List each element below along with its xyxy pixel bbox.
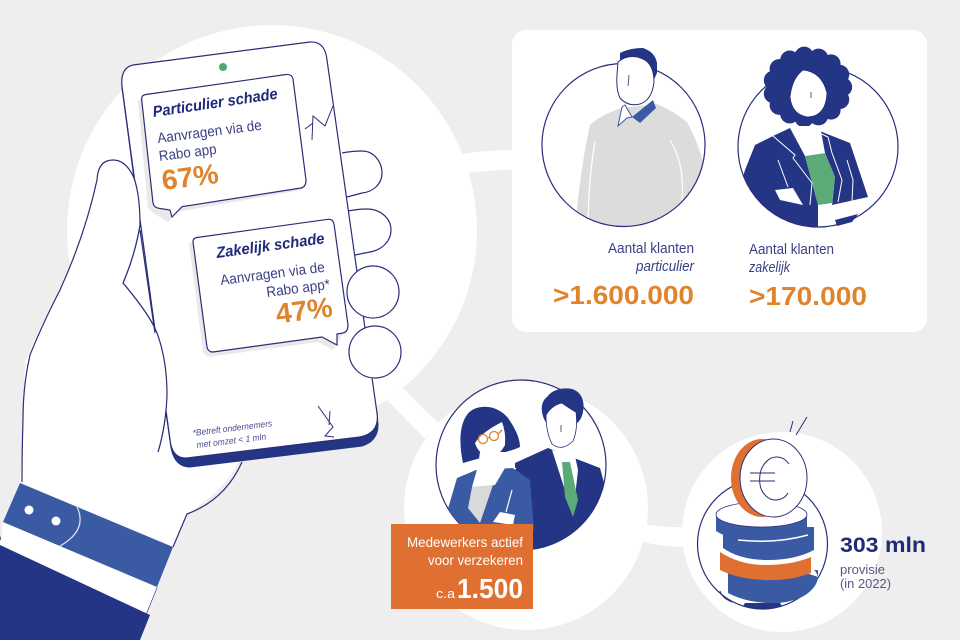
- screen cracks: [305, 106, 334, 437]
- man hair: [542, 388, 584, 424]
- hand: [775, 188, 803, 205]
- icon: euro coins: [698, 417, 828, 609]
- strap flap and holes: [60, 507, 80, 546]
- value 67%: 67%: [160, 158, 220, 196]
- woman top: [468, 485, 493, 523]
- callout label: voor verzekeren: [428, 552, 523, 568]
- footnote: met omzet < 1 mln: [196, 432, 267, 450]
- caption: [840, 562, 891, 591]
- bottom coin: [728, 570, 818, 603]
- jacket collar lines: [473, 460, 516, 469]
- coin highlight: [738, 535, 808, 541]
- icon: private customer: [542, 48, 706, 230]
- stat: business customers: zakelijk: [748, 260, 791, 276]
- heading: Particulier schade: [152, 86, 279, 121]
- hair: [620, 48, 657, 84]
- jacket: [744, 128, 818, 226]
- woman hand: [493, 512, 515, 525]
- stat: private customers: [553, 241, 695, 310]
- body text: [156, 118, 263, 165]
- hand fill: [20, 160, 245, 547]
- glasses: [478, 430, 502, 444]
- stat: commission: [840, 534, 926, 591]
- value 47%: 47%: [274, 291, 334, 329]
- jacket lapels: [773, 125, 853, 205]
- panel: customers: [512, 30, 927, 332]
- callout label: Medewerkers actief: [407, 534, 523, 550]
- label: Aantal klanten: [749, 242, 834, 258]
- bubble body: [142, 74, 306, 217]
- heading: Zakelijk schade: [214, 230, 326, 262]
- watch strap: [3, 483, 173, 587]
- hair: [764, 47, 852, 127]
- bottom arc: [743, 603, 782, 609]
- shirt cuff: [0, 522, 157, 614]
- neck and chest: [792, 126, 825, 156]
- man shirt: [552, 450, 578, 515]
- value: >1.600.000: [553, 280, 694, 310]
- green top: [805, 153, 835, 205]
- stat: business customers: [748, 242, 867, 311]
- hand outline: [0, 160, 242, 614]
- value: >170.000: [749, 281, 867, 311]
- icon: hand holding phone: [0, 42, 401, 640]
- body text: [219, 260, 331, 301]
- woman jacket: [445, 468, 534, 530]
- body text: Rabo app: [158, 142, 218, 165]
- body text: Aanvragen via de: [156, 118, 263, 147]
- man suit: [515, 448, 604, 549]
- footnote: *Betreft ondernemers: [192, 418, 273, 438]
- phone back edge: [170, 413, 378, 467]
- orange coin: [720, 552, 811, 580]
- bubble: particulier schade: [138, 74, 306, 222]
- icon: employees: [436, 380, 606, 560]
- label: Aantal klanten: [608, 241, 694, 257]
- body text: Aanvragen via de: [219, 260, 326, 289]
- callout value: c.a: [436, 586, 456, 601]
- woman neck: [472, 452, 505, 487]
- motion ticks: [790, 417, 807, 435]
- phone body: [122, 42, 377, 458]
- top coin: [716, 514, 807, 542]
- bubble shadow: [189, 224, 344, 357]
- jacket sleeve: [0, 545, 150, 640]
- man tie: [562, 462, 578, 517]
- footnote: [192, 418, 273, 450]
- stat: private customers: particulier: [635, 259, 695, 275]
- callout label: [407, 534, 523, 568]
- arm: [833, 204, 838, 205]
- fingertips: [347, 266, 401, 378]
- woman hair: [460, 407, 520, 463]
- fingers: [342, 151, 391, 255]
- small coin edge: [720, 591, 732, 602]
- bubble: zakelijk schade: [189, 219, 348, 357]
- euro sign: [750, 457, 789, 500]
- sleeve cuff: [835, 214, 858, 226]
- callout value: 1.500: [457, 573, 523, 604]
- second coin: [723, 527, 814, 560]
- sweater folds: [588, 140, 682, 220]
- face: [790, 70, 827, 117]
- body text: Rabo app*: [265, 277, 331, 301]
- icon: business customer: [735, 47, 898, 232]
- sweater: [575, 104, 706, 230]
- circle outline: [738, 67, 898, 227]
- collar: [632, 100, 656, 123]
- callout: employees: [391, 524, 533, 609]
- bubble body: [193, 219, 348, 352]
- bubble shadow: [138, 79, 302, 222]
- man face: [546, 403, 577, 447]
- caption: provisie: [840, 562, 885, 577]
- thumb over phone: [110, 178, 167, 452]
- caption: (in 2022): [840, 576, 891, 591]
- face: [617, 56, 654, 105]
- bottom coin top: [790, 562, 818, 577]
- woman face: [475, 422, 505, 457]
- upright euro coin: [731, 439, 793, 517]
- value: 303 mln: [840, 534, 926, 557]
- camera dot: [219, 63, 227, 71]
